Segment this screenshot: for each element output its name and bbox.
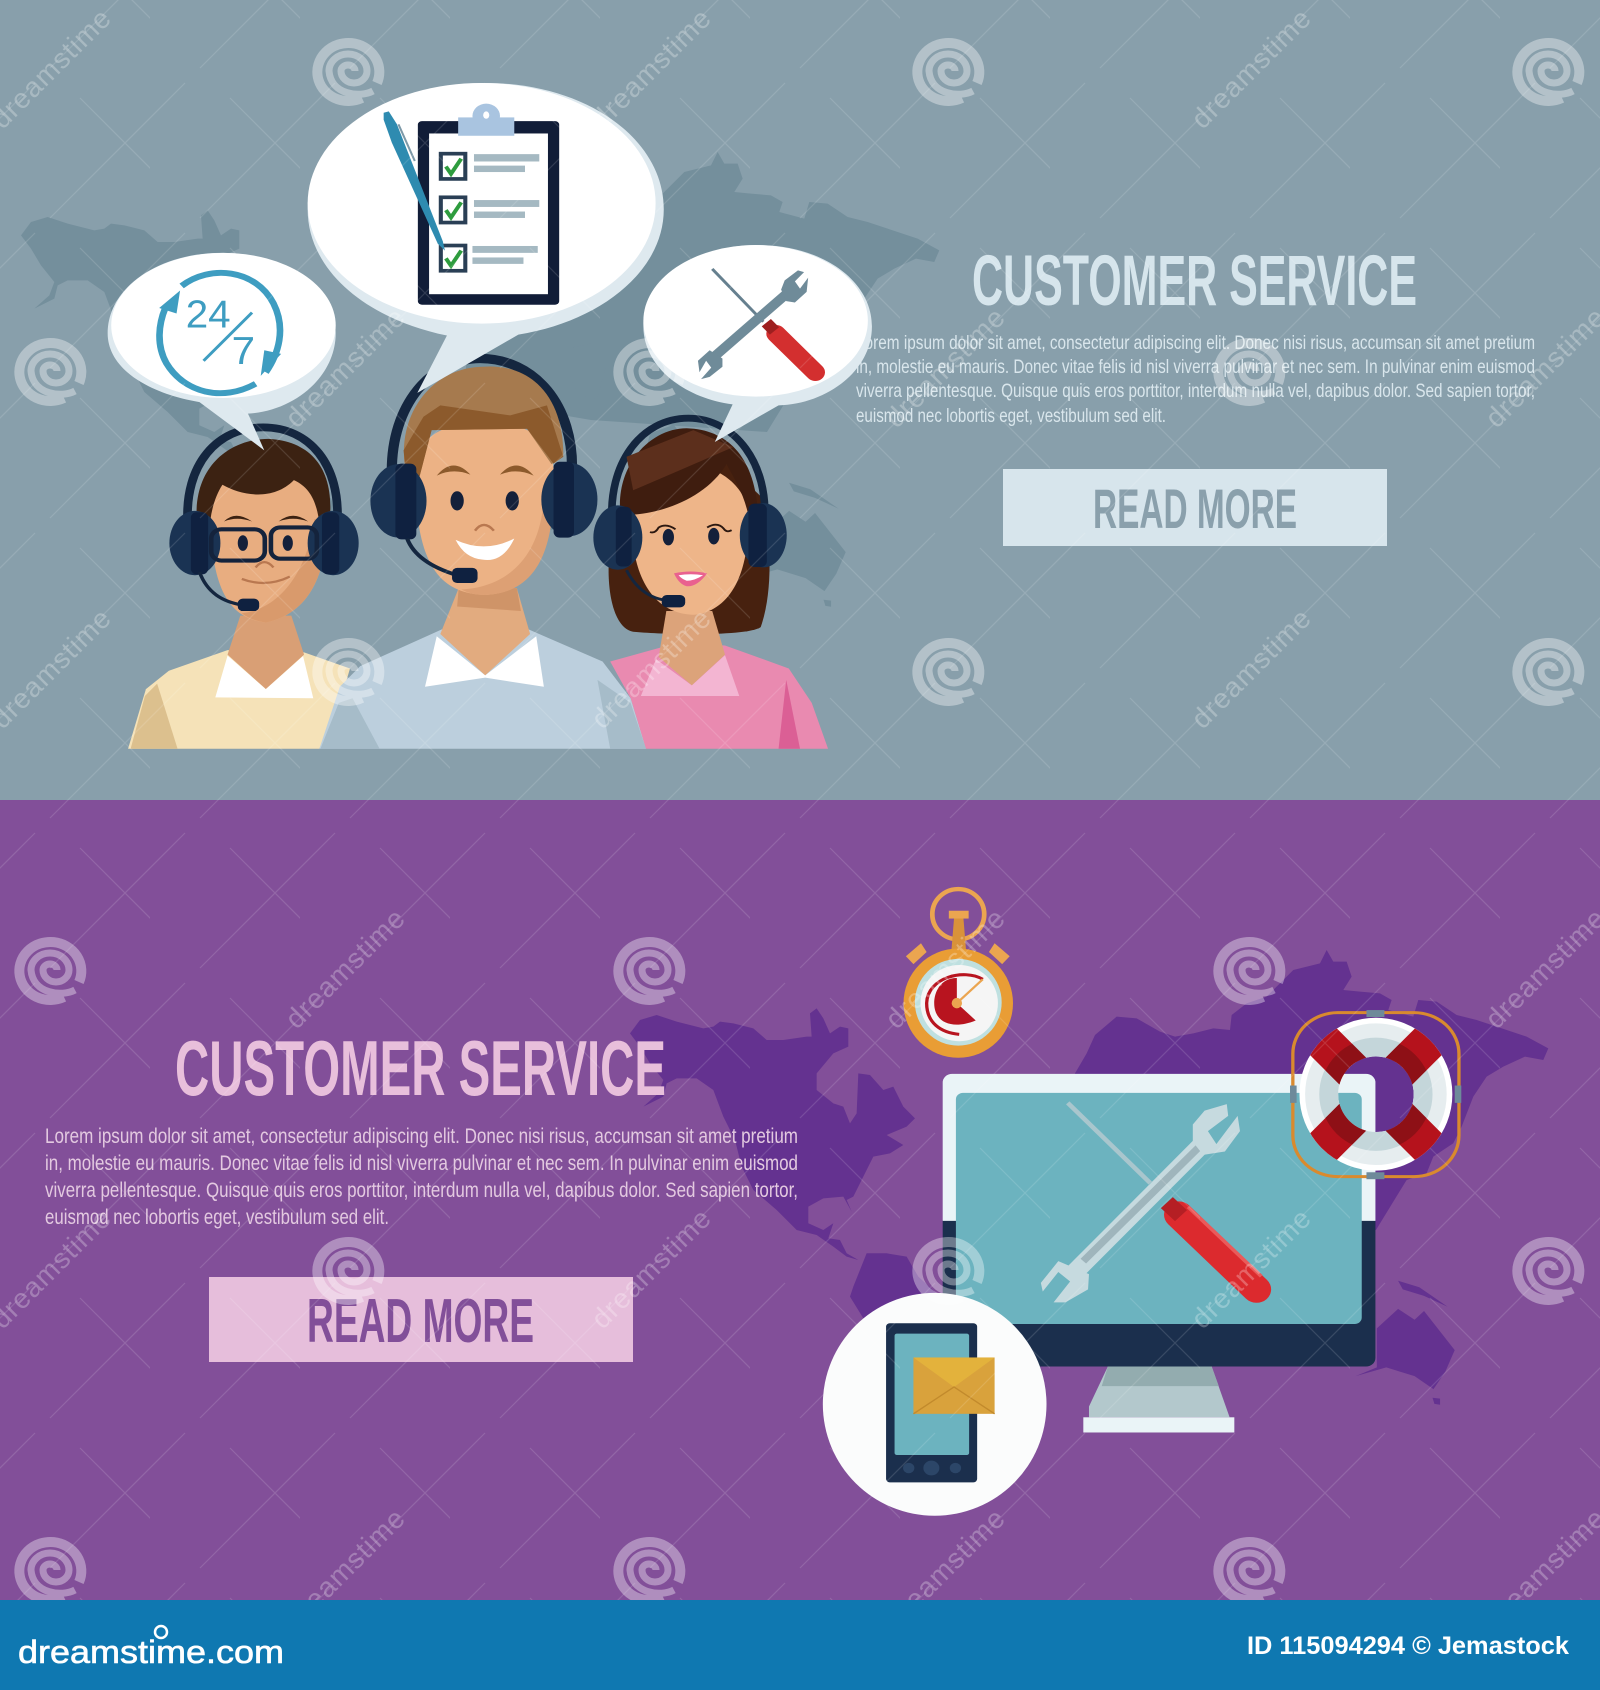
- speech bubble: checklist: [308, 83, 664, 393]
- text block: bottom lorem ipsum: viverra pellentesque. Quisque quis eros porttitor, interdum nulla vel, dapibus dolor. Sed sapien tortor,: [45, 1177, 798, 1202]
- world map: top: [21, 152, 939, 607]
- icon: life buoy: [1290, 1010, 1461, 1179]
- button: bottom read more: READ MORE: [307, 1287, 534, 1356]
- watermark: repeating dreamstime overlay: dreamstime: [1185, 1202, 1317, 1334]
- text block: top lorem ipsum: euismod nec lobortis eget, vestibulum sed elit.: [856, 405, 1166, 427]
- panel: bottom customer service banner: [0, 800, 1600, 1600]
- footer logo: dreamstime.com: dreamstime.com: [18, 1634, 284, 1670]
- watermark: repeating dreamstime overlay: dreamstime: [879, 902, 1011, 1034]
- watermark: repeating dreamstime overlay: dreamstime: [585, 2, 717, 134]
- button: bottom read more: [209, 1277, 633, 1362]
- text block: bottom lorem ipsum: euismod nec lobortis eget, vestibulum sed elit.: [45, 1204, 389, 1229]
- speech bubble: tools: [643, 245, 872, 442]
- text block: bottom lorem ipsum: Lorem ipsum dolor sit amet, consectetur adipiscing elit. Donec nisi risus, accumsan sit amet pretium: [45, 1123, 798, 1148]
- icon: 24/7 clock arrows: [159, 273, 281, 393]
- agent: centre man: [319, 358, 646, 749]
- panel background: slate: [0, 0, 1600, 800]
- watermark: repeating dreamstime overlay: dreamstime: [585, 602, 717, 734]
- icon: 24/7 clock arrows: 24: [186, 293, 231, 336]
- watermark: repeating dreamstime overlay: dreamstime: [879, 301, 1011, 433]
- icon: pen: [384, 111, 445, 251]
- heading: bottom title: CUSTOMER SERVICE: [175, 1024, 666, 1112]
- footer credit: image id: ID 115094294 © Jemastock: [1247, 1632, 1569, 1660]
- agent: right woman: [593, 418, 828, 749]
- speech bubble: 24/7: [108, 253, 336, 450]
- icon: stopwatch: [904, 889, 1013, 1058]
- watermark: repeating dreamstime overlay: dreamstime: [879, 1502, 1011, 1634]
- footer bar: [0, 1600, 1600, 1690]
- icon: desktop monitor: [943, 1074, 1375, 1432]
- watermark: repeating dreamstime overlay: dreamstime: [279, 1502, 411, 1634]
- panel: top customer service banner: [0, 0, 1600, 800]
- icon: wrench and screwdriver on screen: [1041, 1103, 1261, 1302]
- world map: bottom: [630, 950, 1548, 1405]
- watermark: repeating dreamstime overlay: dreamstime: [585, 1202, 717, 1334]
- illustration: monitor and support icons: [823, 889, 1461, 1516]
- illustration: three call centre agents with speech bubbles: [108, 83, 872, 749]
- watermark: repeating dreamstime overlay: dreamstime: [1185, 2, 1317, 134]
- watermark: repeating dreamstime overlay: dreamstime: [279, 902, 411, 1034]
- text block: top lorem ipsum: [856, 332, 1535, 427]
- text block: bottom lorem ipsum: [45, 1123, 798, 1229]
- button: top read more: [1003, 469, 1387, 546]
- watermark: repeating dreamstime overlay: dreamstime: [1185, 602, 1317, 734]
- icon: clipboard checklist: [384, 104, 559, 305]
- text block: bottom lorem ipsum: in, molestie eu mauris. Donec vitae felis id nisl viverra pulvinar et nec sem. In pulvinar enim euismod: [45, 1150, 798, 1175]
- button: top read more: READ MORE: [1093, 477, 1297, 540]
- panel background: purple: [0, 800, 1600, 1600]
- icon: wrench and screwdriver: [698, 269, 815, 379]
- watermark: repeating dreamstime overlay: dreamstime: [279, 301, 411, 433]
- agent: man with glasses: [128, 427, 359, 749]
- icon: 24/7 clock arrows: 7: [232, 329, 255, 373]
- icon: phone with envelope in white circle: [823, 1293, 1047, 1516]
